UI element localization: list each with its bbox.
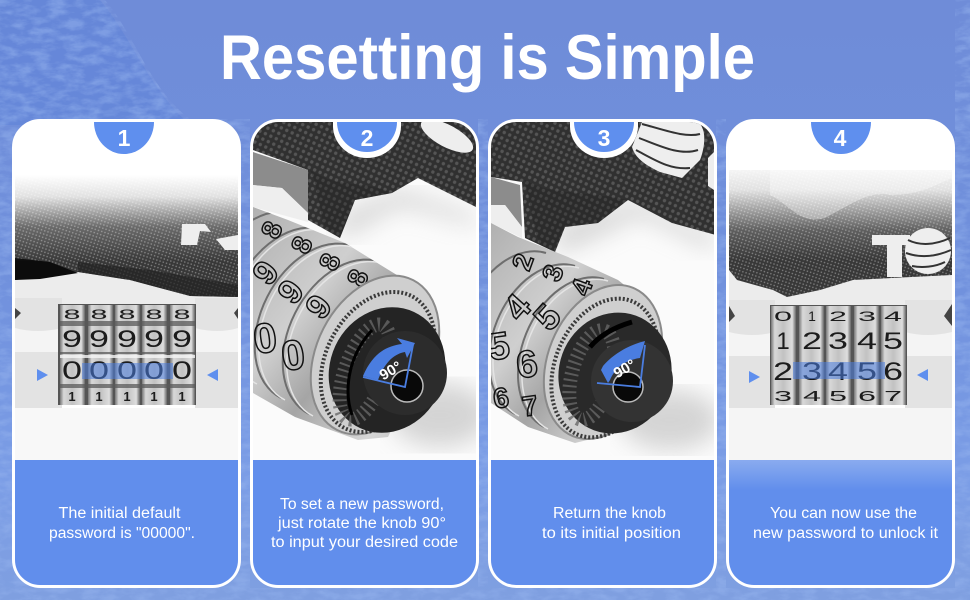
lock digits: 8 (146, 306, 163, 322)
rotated digits: 8 (341, 265, 375, 291)
caption text 3 (542, 505, 681, 542)
knob (542, 284, 664, 440)
lock digits: 0 (89, 357, 109, 385)
panel: step 4 (728, 120, 954, 586)
lock digits: 9 (117, 326, 137, 353)
rotated digits: 4 (495, 286, 539, 328)
lock digits: 0 (172, 357, 192, 385)
90 degree marker: 90° (611, 356, 639, 382)
lock digits: 7 (884, 388, 902, 405)
lock digits: 1 (178, 389, 186, 404)
caption text 4 (753, 505, 939, 542)
rotated digits: 4 (565, 275, 599, 299)
rotated digits: 6 (514, 343, 540, 387)
lock digits: 0 (774, 308, 792, 324)
rotated digits: 9 (298, 288, 340, 326)
rotated digits: 5 (525, 296, 569, 338)
lock digits: 4 (803, 388, 821, 405)
lock digits: 1 (123, 389, 131, 404)
lock digits: 5 (829, 388, 847, 405)
lock digits (773, 308, 903, 405)
lock digits: 1 (95, 389, 103, 404)
caption text 2 (271, 496, 458, 551)
rotated digits: 8 (313, 249, 347, 275)
caption text 4: new password to unlock it (753, 525, 939, 542)
rotated digits: 5 (486, 325, 512, 369)
lock digits: 1 (150, 389, 158, 404)
lock digits: 0 (62, 357, 82, 385)
badge 3 (570, 122, 638, 158)
lock digits (62, 306, 192, 404)
photo: lock with new code 23456 (729, 170, 952, 460)
lock digits: 8 (174, 306, 191, 322)
wheel grooves (491, 250, 608, 430)
caption text 1 (49, 505, 195, 542)
badge 4 (811, 122, 871, 154)
badge 1 (94, 122, 154, 154)
90 degree marker: 90° (377, 358, 405, 384)
badge 2: 2 (361, 125, 373, 151)
badge 3: 3 (598, 125, 610, 151)
title: Resetting is Simple (220, 23, 755, 93)
lock digits: 0 (144, 357, 164, 385)
lock digits: 3 (774, 388, 792, 405)
rotated digits: 7 (520, 390, 540, 422)
lock digits: 9 (144, 326, 164, 353)
lock digits: 3 (828, 328, 848, 355)
lock digits: 5 (883, 328, 903, 355)
rotated digits: 0 (278, 330, 308, 380)
badge 2 (333, 122, 401, 158)
rotated digits: 6 (491, 382, 511, 414)
rotated digits: 0 (250, 313, 280, 363)
rotated digits: 9 (270, 273, 312, 311)
90 degree marker (597, 341, 645, 387)
lock digits: 4 (884, 308, 902, 324)
panel: step 1 (14, 120, 240, 586)
lock digits: 9 (62, 326, 82, 353)
panel: step 3 (488, 119, 717, 588)
rotated digits: 3 (536, 261, 570, 285)
caption text 1: The initial default (58, 505, 181, 522)
lock digits: 2 (773, 358, 793, 386)
caption text 1: password is "00000". (49, 525, 195, 542)
wheel grooves (253, 212, 377, 416)
caption text 2: To set a new password, (280, 496, 444, 513)
lock digits: 8 (64, 306, 81, 322)
lock digits: 3 (858, 308, 876, 324)
photo: returning the knob (491, 122, 714, 456)
90 degree marker (363, 338, 415, 387)
lock digits: 4 (828, 358, 848, 386)
lock digits: 8 (90, 306, 108, 322)
photo: rotating the knob 90 degrees (253, 122, 476, 454)
lock digits: 8 (118, 306, 136, 322)
caption text 3: Return the knob (553, 505, 666, 522)
rotated digits: 2 (506, 250, 540, 274)
lock digits: 5 (857, 358, 877, 386)
caption text 3: to its initial position (542, 525, 681, 542)
rotated digits (253, 221, 368, 371)
rotated digits (491, 254, 593, 417)
caption text 2: just rotate the knob 90° (277, 515, 446, 532)
caption panel 1 (15, 460, 238, 585)
lock digits: 2 (829, 308, 847, 324)
knob (310, 274, 440, 436)
caption panel 3 (491, 460, 714, 585)
badge 4: 4 (834, 125, 847, 151)
caption panel 4 (729, 460, 952, 585)
lock digits: 0 (117, 357, 137, 385)
panel: step 2 (250, 119, 479, 588)
lock digits: 4 (857, 328, 877, 355)
caption text 2: to input your desired code (271, 534, 458, 551)
lock digits: 2 (802, 328, 822, 355)
lock digits: 6 (858, 388, 876, 405)
lock digits: 1 (68, 389, 76, 404)
photo: default lock at 00000 (15, 181, 238, 408)
badge 1: 1 (118, 125, 131, 151)
caption text 4: You can now use the (770, 505, 917, 522)
lock digits: 1 (776, 328, 790, 355)
rotated digits: 8 (255, 217, 289, 243)
lock digits: 9 (89, 326, 109, 353)
lock digits: 9 (172, 326, 192, 353)
lock digits: 1 (808, 308, 816, 324)
lock digits: 3 (802, 358, 822, 386)
rotated digits: 9 (245, 254, 287, 292)
lock digits: 6 (883, 358, 903, 386)
rotated digits: 8 (285, 232, 319, 258)
caption panel 2 (253, 460, 476, 585)
